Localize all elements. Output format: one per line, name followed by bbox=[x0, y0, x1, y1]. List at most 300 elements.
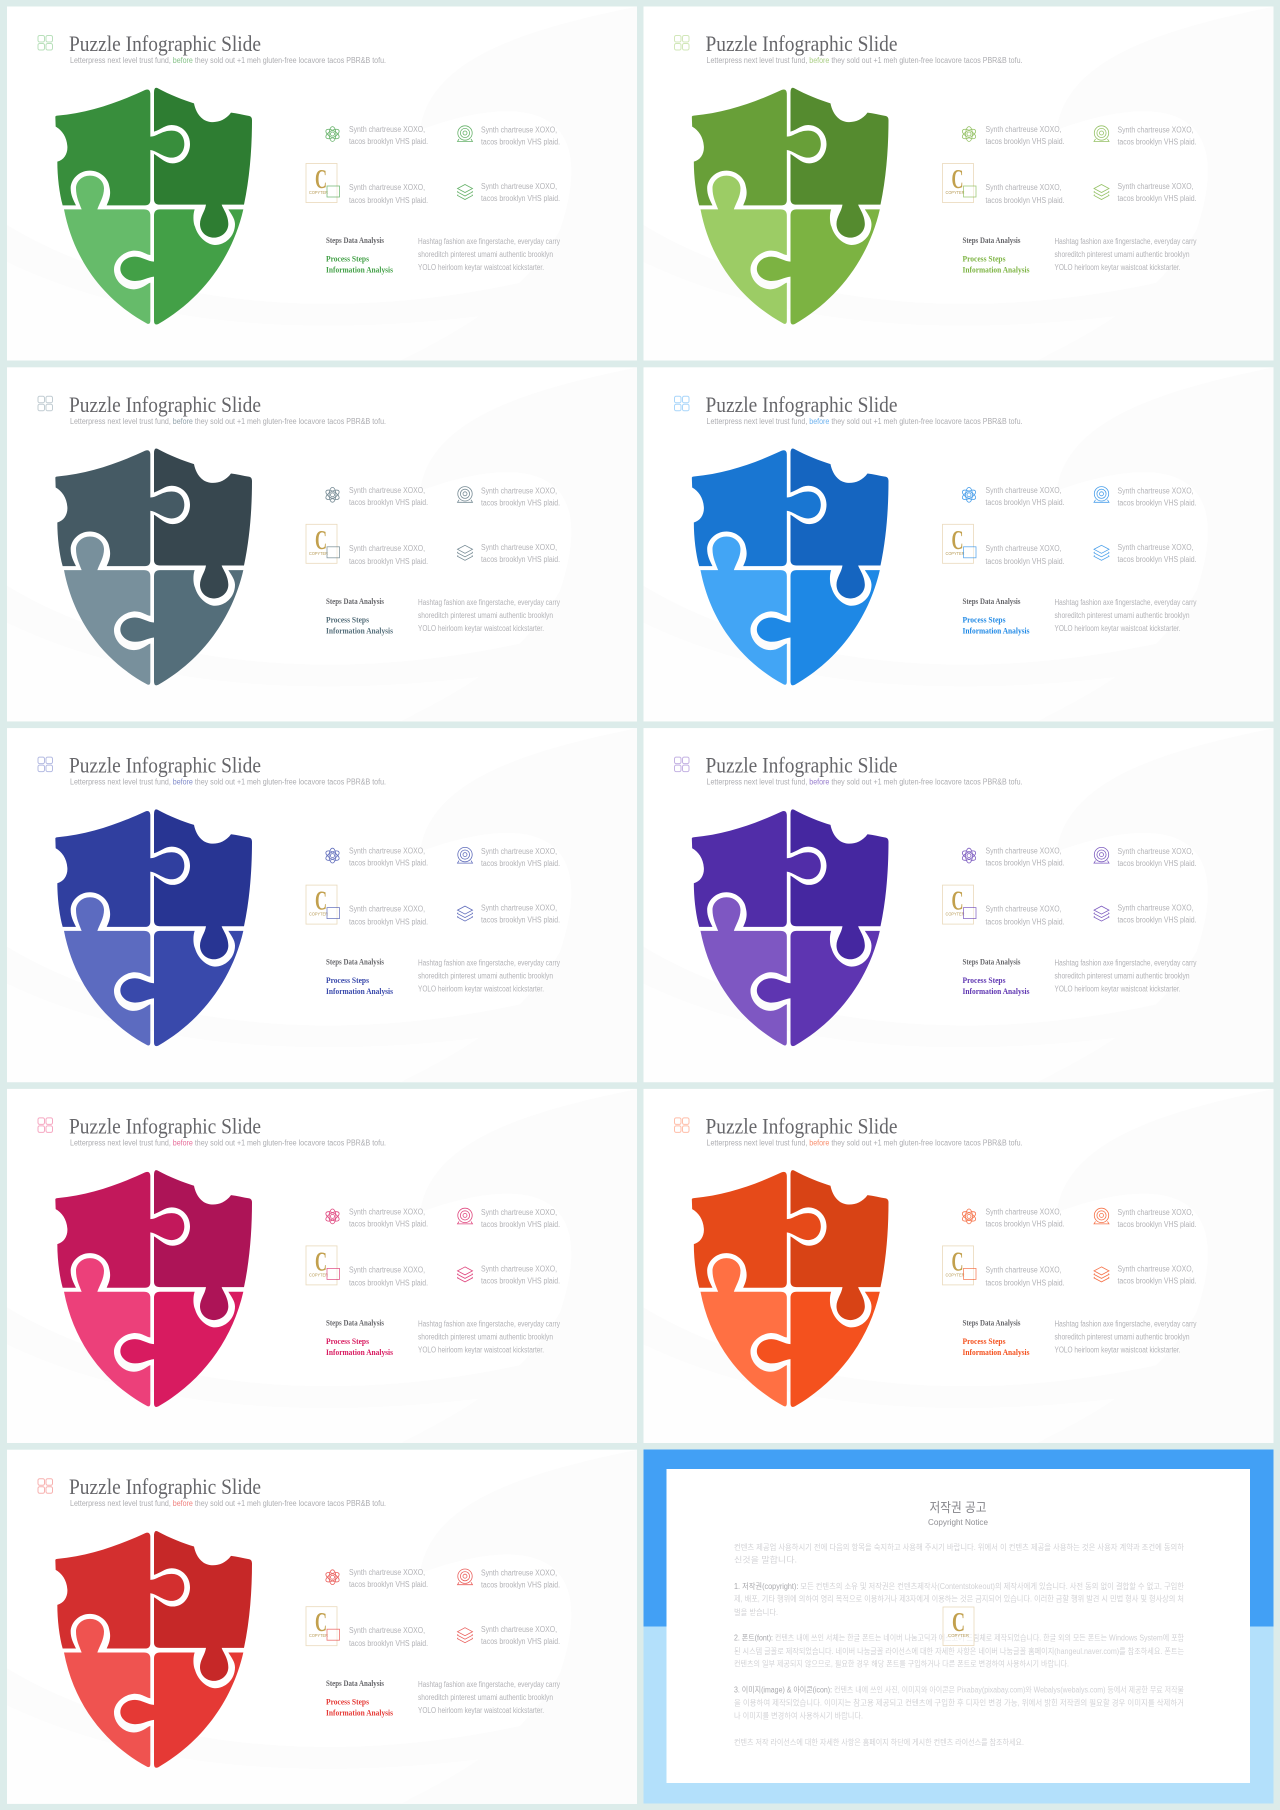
feature text 3: tacos brooklyn VHS plaid. bbox=[986, 557, 1064, 566]
feature text 2: Synth chartreuse XOXO, bbox=[481, 126, 557, 134]
puzzle shield bbox=[692, 88, 888, 325]
feature text 1 bbox=[349, 125, 428, 146]
panel: green slide bbox=[7, 6, 640, 361]
icon: layers bbox=[458, 1628, 472, 1643]
feature text 2: tacos brooklyn VHS plaid. bbox=[481, 1581, 560, 1590]
puzzle shield bbox=[692, 449, 888, 685]
subtitle: Letterpress next level trust fund, before they sold out +1 meh gluten-free locavore tacos PBR&B tofu. bbox=[706, 56, 1022, 65]
watermark thumbnail bbox=[306, 524, 340, 563]
feature text 4: Synth chartreuse XOXO, bbox=[481, 1264, 557, 1273]
slide background bbox=[644, 1088, 1276, 1443]
feature text 1 bbox=[349, 486, 428, 507]
icon: title grid bbox=[674, 36, 689, 50]
puzzle shield bbox=[55, 449, 252, 685]
slide background bbox=[7, 1449, 640, 1804]
steps labels: Information Analysis bbox=[326, 625, 394, 635]
feature text 1: tacos brooklyn VHS plaid. bbox=[349, 498, 428, 507]
feature text 1: tacos brooklyn VHS plaid. bbox=[349, 859, 428, 868]
feature text 3 bbox=[986, 544, 1064, 566]
feature text 2: Synth chartreuse XOXO, bbox=[481, 1208, 557, 1217]
description: YOLO heirloom keytar waistcoat kickstarter. bbox=[1054, 624, 1180, 633]
icon: target bbox=[458, 126, 472, 142]
puzzle shield bbox=[55, 1531, 252, 1768]
steps labels: Process Steps bbox=[962, 975, 1006, 985]
watermark thumbnail: C bbox=[315, 886, 327, 916]
light blue frame bottom bbox=[644, 1626, 1274, 1804]
watermark thumbnail: C bbox=[952, 164, 964, 194]
feature text 3: tacos brooklyn VHS plaid. bbox=[349, 196, 428, 205]
watermark thumbnail: COPYTER bbox=[309, 912, 329, 917]
feature text 4: tacos brooklyn VHS plaid. bbox=[481, 194, 560, 203]
watermark thumbnail bbox=[306, 1607, 340, 1646]
notice body text bbox=[734, 1542, 1185, 1747]
feature text 2 bbox=[1118, 847, 1196, 868]
feature text 2 bbox=[481, 126, 560, 146]
icon: atom bbox=[961, 1209, 977, 1224]
icon: atom bbox=[961, 848, 977, 863]
feature text 2 bbox=[481, 1208, 560, 1229]
icon: layers bbox=[458, 545, 472, 560]
feature text 1 bbox=[986, 1207, 1064, 1228]
feature text 3: tacos brooklyn VHS plaid. bbox=[986, 1278, 1064, 1287]
description bbox=[418, 959, 560, 994]
steps labels bbox=[326, 596, 394, 635]
icon: target bbox=[458, 1569, 472, 1585]
watermark thumbnail: COPYTER bbox=[309, 1272, 329, 1277]
steps labels: Steps Data Analysis bbox=[962, 1317, 1021, 1327]
watermark centre: COPYTER bbox=[948, 1633, 970, 1638]
description: Hashtag fashion axe fingerstache, everyday carry bbox=[418, 959, 560, 968]
puzzle shield bbox=[55, 1170, 252, 1407]
notice body text: 제, 배포, 기타 행위에 의하여 영리 목적으로 이용하거나 제3자에게 이용하는 것은 금지되어 있습니다. 이러한 금할 행위 발견 시 민법 형사 및 형사상의 처 bbox=[734, 1594, 1184, 1604]
feature text 4: tacos brooklyn VHS plaid. bbox=[481, 1276, 560, 1285]
icon: atom bbox=[324, 127, 341, 141]
feature text 4: tacos brooklyn VHS plaid. bbox=[481, 1637, 560, 1646]
feature text 1: Synth chartreuse XOXO, bbox=[349, 486, 425, 495]
description: YOLO heirloom keytar waistcoat kickstarter. bbox=[418, 263, 544, 272]
notice body text: 을 이용하여 제작되었습니다. 이미지는 참고용 제공되고 컨텐츠에 구입한 후 디자인 변경 가능, 위에서 밝힌 저작권의 필요할 경우 이미지를 삭제하거 bbox=[734, 1698, 1184, 1708]
feature text 4: Synth chartreuse XOXO, bbox=[481, 1625, 557, 1634]
feature text 3: Synth chartreuse XOXO, bbox=[986, 905, 1062, 914]
feature text 1 bbox=[986, 486, 1064, 507]
feature text 2: tacos brooklyn VHS plaid. bbox=[481, 138, 560, 146]
feature text 3 bbox=[986, 1265, 1064, 1287]
steps labels: Steps Data Analysis bbox=[962, 596, 1021, 606]
panel: blue slide bbox=[644, 367, 1276, 722]
description: Hashtag fashion axe fingerstache, everyday carry bbox=[418, 237, 560, 246]
slide background bbox=[7, 1088, 640, 1443]
steps labels bbox=[962, 596, 1030, 635]
icon: title grid bbox=[38, 1479, 52, 1493]
steps labels: Steps Data Analysis bbox=[326, 235, 385, 245]
feature text 2: tacos brooklyn VHS plaid. bbox=[1118, 138, 1196, 146]
watermark thumbnail: COPYTER bbox=[946, 912, 965, 917]
feature text 4 bbox=[1118, 543, 1196, 564]
feature text 2: Synth chartreuse XOXO, bbox=[1118, 126, 1194, 134]
description: shoreditch pinterest umami authentic brooklyn bbox=[418, 972, 553, 981]
watermark thumbnail bbox=[942, 1246, 976, 1285]
feature text 1: Synth chartreuse XOXO, bbox=[349, 1207, 425, 1216]
subtitle: Letterpress next level trust fund, before they sold out +1 meh gluten-free locavore tacos PBR&B tofu. bbox=[70, 1138, 386, 1147]
panel: copyright notice bbox=[644, 1450, 1274, 1804]
feature text 2: Synth chartreuse XOXO, bbox=[481, 486, 557, 495]
description bbox=[1054, 598, 1196, 633]
steps labels: Information Analysis bbox=[326, 1708, 394, 1718]
feature text 1: tacos brooklyn VHS plaid. bbox=[349, 1219, 428, 1228]
watermark thumbnail: COPYTER bbox=[309, 1633, 329, 1638]
steps labels: Process Steps bbox=[326, 1336, 370, 1346]
feature text 1: Synth chartreuse XOXO, bbox=[986, 847, 1062, 856]
feature text 2 bbox=[481, 1569, 560, 1590]
slide background bbox=[644, 728, 1276, 1083]
watermark thumbnail bbox=[306, 885, 340, 924]
slide background bbox=[644, 6, 1276, 361]
steps labels: Process Steps bbox=[962, 614, 1006, 624]
title: Puzzle Infographic Slide bbox=[69, 1113, 261, 1138]
panel: indigo slide bbox=[7, 728, 640, 1083]
icon: layers bbox=[1094, 906, 1109, 921]
icon: atom bbox=[324, 848, 341, 863]
title: Puzzle Infographic Slide bbox=[706, 392, 898, 417]
title: Puzzle Infographic Slide bbox=[69, 392, 261, 417]
feature text 2: tacos brooklyn VHS plaid. bbox=[1118, 859, 1196, 868]
description bbox=[418, 237, 560, 272]
feature text 2: Synth chartreuse XOXO, bbox=[1118, 847, 1194, 856]
watermark thumbnail: C bbox=[315, 1246, 327, 1276]
title: Puzzle Infographic Slide bbox=[706, 1113, 898, 1138]
description: YOLO heirloom keytar waistcoat kickstarter. bbox=[1054, 1345, 1180, 1354]
feature text 3: tacos brooklyn VHS plaid. bbox=[349, 557, 428, 566]
steps labels: Steps Data Analysis bbox=[326, 1678, 385, 1688]
description: YOLO heirloom keytar waistcoat kickstarter. bbox=[418, 1706, 544, 1715]
description: Hashtag fashion axe fingerstache, everyday carry bbox=[1054, 598, 1196, 607]
title: Puzzle Infographic Slide bbox=[69, 1474, 261, 1499]
feature text 2: tacos brooklyn VHS plaid. bbox=[481, 859, 560, 868]
feature text 1: tacos brooklyn VHS plaid. bbox=[986, 859, 1064, 868]
steps labels: Information Analysis bbox=[962, 625, 1030, 635]
feature text 3: Synth chartreuse XOXO, bbox=[986, 1265, 1062, 1274]
feature text 4 bbox=[1118, 182, 1196, 203]
puzzle shield bbox=[55, 809, 252, 1046]
description: YOLO heirloom keytar waistcoat kickstarter. bbox=[1054, 985, 1180, 994]
feature text 4: tacos brooklyn VHS plaid. bbox=[1118, 1276, 1196, 1285]
feature text 3 bbox=[349, 905, 428, 927]
feature text 3 bbox=[986, 905, 1064, 927]
title: Puzzle Infographic Slide bbox=[706, 753, 898, 778]
icon: layers bbox=[1094, 1267, 1109, 1282]
icon: layers bbox=[458, 906, 472, 921]
feature text 3: Synth chartreuse XOXO, bbox=[349, 544, 425, 553]
icon: atom bbox=[324, 1570, 341, 1585]
feature text 2: Synth chartreuse XOXO, bbox=[481, 1569, 557, 1578]
notice body text: 컨텐츠 저작 라이선스에 대한 자세한 사항은 홈페이지 하단에 게시한 컨텐츠 라이선스를 참조하세요. bbox=[734, 1737, 1024, 1747]
slide background bbox=[7, 6, 640, 361]
notice body text: 벌을 받습니다. bbox=[734, 1607, 778, 1617]
icon: layers bbox=[458, 1267, 472, 1282]
subtitle: Letterpress next level trust fund, before they sold out +1 meh gluten-free locavore tacos PBR&B tofu. bbox=[70, 417, 386, 426]
description: shoreditch pinterest umami authentic brooklyn bbox=[418, 250, 553, 259]
notice body text: 2. 폰트(font): 컨텐츠 내에 쓰인 서체는 한글 폰트는 네이버 나눔고딕과 에스코어 드림체로 제작되었습니다. 한글 외의 모든 폰트는 Windows System에 포함 bbox=[734, 1632, 1185, 1642]
feature text 3 bbox=[349, 1626, 428, 1648]
icon: atom bbox=[961, 127, 977, 141]
watermark thumbnail: C bbox=[315, 525, 327, 555]
watermark thumbnail bbox=[306, 1246, 340, 1285]
icon: title grid bbox=[674, 757, 689, 772]
feature text 3: tacos brooklyn VHS plaid. bbox=[349, 1639, 428, 1648]
feature text 4 bbox=[481, 182, 560, 203]
slide background bbox=[644, 367, 1276, 722]
icon: atom bbox=[961, 487, 977, 502]
feature text 4: tacos brooklyn VHS plaid. bbox=[481, 916, 560, 925]
steps labels: Process Steps bbox=[326, 614, 370, 624]
description bbox=[418, 598, 560, 633]
feature text 4: tacos brooklyn VHS plaid. bbox=[481, 555, 560, 564]
feature text 3: Synth chartreuse XOXO, bbox=[986, 183, 1062, 192]
feature text 3: Synth chartreuse XOXO, bbox=[349, 905, 425, 914]
icon: atom bbox=[324, 487, 341, 502]
feature text 3 bbox=[349, 183, 428, 205]
icon: title grid bbox=[674, 396, 689, 411]
description: shoreditch pinterest umami authentic brooklyn bbox=[1054, 1332, 1190, 1341]
icon: title grid bbox=[38, 36, 52, 50]
steps labels: Steps Data Analysis bbox=[326, 957, 385, 967]
panel: light green slide bbox=[644, 6, 1276, 361]
icon: target bbox=[458, 1208, 472, 1224]
notice body text: 컨텐츠 제공업 사용하시기 전에 다음의 항목을 숙지하고 사용해 주시기 바랍니다. 위에서 이 컨텐츠 제공을 사용하는 것은 사용자 계약과 조건에 동의하 bbox=[734, 1542, 1185, 1552]
description: shoreditch pinterest umami authentic brooklyn bbox=[1054, 611, 1190, 620]
steps labels: Information Analysis bbox=[326, 264, 394, 274]
feature text 3: tacos brooklyn VHS plaid. bbox=[986, 196, 1064, 205]
icon: target bbox=[458, 847, 472, 863]
subtitle: Letterpress next level trust fund, before they sold out +1 meh gluten-free locavore tacos PBR&B tofu. bbox=[70, 778, 386, 787]
panel: deep orange slide bbox=[644, 1088, 1276, 1443]
feature text 1 bbox=[986, 847, 1064, 868]
watermark thumbnail bbox=[942, 164, 976, 202]
feature text 1: Synth chartreuse XOXO, bbox=[349, 1568, 425, 1577]
slide background bbox=[7, 367, 640, 722]
feature text 1: Synth chartreuse XOXO, bbox=[986, 486, 1062, 495]
feature text 1: tacos brooklyn VHS plaid. bbox=[986, 498, 1064, 507]
description bbox=[418, 1680, 560, 1715]
icon: title grid bbox=[674, 1118, 689, 1132]
feature text 2: tacos brooklyn VHS plaid. bbox=[1118, 1220, 1196, 1229]
description: YOLO heirloom keytar waistcoat kickstarter. bbox=[1054, 263, 1180, 272]
feature text 2: tacos brooklyn VHS plaid. bbox=[1118, 498, 1196, 507]
steps labels: Information Analysis bbox=[962, 1347, 1030, 1357]
description bbox=[1054, 1319, 1196, 1354]
feature text 1: tacos brooklyn VHS plaid. bbox=[986, 137, 1064, 146]
description: shoreditch pinterest umami authentic brooklyn bbox=[1054, 250, 1190, 259]
watermark thumbnail: COPYTER bbox=[309, 551, 329, 556]
feature text 2: tacos brooklyn VHS plaid. bbox=[481, 1220, 560, 1229]
steps labels: Process Steps bbox=[962, 1336, 1006, 1346]
feature text 4: Synth chartreuse XOXO, bbox=[481, 543, 557, 552]
feature text 1 bbox=[349, 1207, 428, 1228]
feature text 3: Synth chartreuse XOXO, bbox=[349, 183, 425, 192]
watermark thumbnail bbox=[942, 885, 976, 924]
steps labels: Process Steps bbox=[326, 975, 370, 985]
steps labels: Information Analysis bbox=[326, 1347, 394, 1357]
watermark centre: C bbox=[952, 1607, 965, 1637]
steps labels bbox=[326, 957, 394, 996]
icon: target bbox=[1094, 487, 1109, 502]
steps labels: Steps Data Analysis bbox=[962, 957, 1021, 967]
steps labels bbox=[326, 1317, 394, 1357]
feature text 3: Synth chartreuse XOXO, bbox=[986, 544, 1062, 553]
watermark thumbnail: C bbox=[952, 1246, 964, 1276]
feature text 3: Synth chartreuse XOXO, bbox=[349, 1626, 425, 1635]
feature text 1 bbox=[349, 1568, 428, 1589]
feature text 2 bbox=[1118, 126, 1196, 146]
white notice card bbox=[666, 1469, 1250, 1783]
description: Hashtag fashion axe fingerstache, everyday carry bbox=[418, 1680, 560, 1689]
watermark thumbnail: C bbox=[315, 1607, 327, 1637]
subtitle: Letterpress next level trust fund, before they sold out +1 meh gluten-free locavore tacos PBR&B tofu. bbox=[706, 778, 1022, 787]
description: Hashtag fashion axe fingerstache, everyday carry bbox=[418, 1319, 560, 1328]
steps labels bbox=[326, 235, 394, 274]
feature text 4 bbox=[481, 1625, 560, 1646]
steps labels: Steps Data Analysis bbox=[326, 1317, 385, 1327]
feature text 4 bbox=[1118, 904, 1196, 925]
feature text 1: tacos brooklyn VHS plaid. bbox=[349, 1580, 428, 1589]
steps labels: Information Analysis bbox=[962, 264, 1030, 274]
icon: title grid bbox=[38, 1118, 52, 1132]
puzzle shield bbox=[55, 88, 252, 325]
watermark thumbnail: COPYTER bbox=[946, 190, 965, 195]
notice heading korean: 저작권 공고 bbox=[930, 1500, 987, 1515]
feature text 2 bbox=[1118, 486, 1196, 507]
icon: title grid bbox=[38, 396, 52, 411]
feature text 3: tacos brooklyn VHS plaid. bbox=[986, 918, 1064, 927]
icon: layers bbox=[1094, 545, 1109, 560]
watermark thumbnail bbox=[306, 164, 340, 202]
feature text 3 bbox=[349, 1265, 428, 1287]
subtitle: Letterpress next level trust fund, before they sold out +1 meh gluten-free locavore tacos PBR&B tofu. bbox=[70, 1499, 386, 1508]
steps labels: Process Steps bbox=[326, 254, 370, 264]
icon: layers bbox=[458, 184, 472, 200]
slide background bbox=[7, 728, 640, 1083]
feature text 2 bbox=[1118, 1208, 1196, 1229]
description: shoreditch pinterest umami authentic brooklyn bbox=[418, 611, 553, 620]
subtitle: Letterpress next level trust fund, before they sold out +1 meh gluten-free locavore tacos PBR&B tofu. bbox=[706, 1138, 1022, 1147]
watermark thumbnail: COPYTER bbox=[309, 190, 329, 195]
watermark thumbnail: COPYTER bbox=[946, 1272, 965, 1277]
feature text 2 bbox=[481, 486, 560, 507]
feature text 3: tacos brooklyn VHS plaid. bbox=[349, 1278, 428, 1287]
feature text 4: Synth chartreuse XOXO, bbox=[1118, 904, 1194, 913]
title: Puzzle Infographic Slide bbox=[706, 31, 898, 56]
notice body text: 나 이미지를 변경하여 사용하시기 바랍니다. bbox=[734, 1710, 863, 1720]
feature text 1 bbox=[986, 125, 1064, 146]
feature text 4: tacos brooklyn VHS plaid. bbox=[1118, 555, 1196, 564]
description bbox=[418, 1319, 560, 1354]
description: Hashtag fashion axe fingerstache, everyday carry bbox=[1054, 237, 1196, 246]
puzzle shield bbox=[692, 1170, 888, 1407]
steps labels: Information Analysis bbox=[962, 986, 1030, 996]
steps labels bbox=[962, 1317, 1030, 1357]
steps labels: Process Steps bbox=[962, 254, 1006, 264]
icon: target bbox=[1094, 847, 1109, 863]
feature text 3 bbox=[986, 183, 1064, 205]
description bbox=[1054, 959, 1196, 994]
description: YOLO heirloom keytar waistcoat kickstarter. bbox=[418, 624, 544, 633]
description: shoreditch pinterest umami authentic brooklyn bbox=[418, 1693, 553, 1702]
subtitle: Letterpress next level trust fund, before they sold out +1 meh gluten-free locavore tacos PBR&B tofu. bbox=[70, 56, 386, 65]
steps labels bbox=[326, 1678, 394, 1718]
panel: pink slide bbox=[7, 1088, 640, 1443]
watermark thumbnail bbox=[942, 524, 976, 563]
feature text 4: Synth chartreuse XOXO, bbox=[1118, 1264, 1194, 1273]
steps labels: Steps Data Analysis bbox=[962, 235, 1021, 245]
feature text 2: Synth chartreuse XOXO, bbox=[481, 847, 557, 856]
steps labels: Steps Data Analysis bbox=[326, 596, 385, 606]
icon: target bbox=[1094, 1208, 1109, 1224]
feature text 4: Synth chartreuse XOXO, bbox=[481, 904, 557, 913]
description: Hashtag fashion axe fingerstache, everyday carry bbox=[418, 598, 560, 607]
steps labels: Process Steps bbox=[326, 1697, 370, 1707]
description: Hashtag fashion axe fingerstache, everyday carry bbox=[1054, 959, 1196, 968]
watermark thumbnail: C bbox=[952, 525, 964, 555]
feature text 4: Synth chartreuse XOXO, bbox=[481, 182, 557, 191]
feature text 2 bbox=[481, 847, 560, 868]
watermark thumbnail: COPYTER bbox=[946, 551, 965, 556]
notice body text: 컨텐츠의 일부 제공되지 않으므로, 필요한 경우 해당 폰트를 구입하거나 다른 폰트로 변경하여 사용하시기 바랍니다. bbox=[734, 1658, 1069, 1668]
notice body text: 된 시스템 글꼴로 제작되었습니다. 네이버 나눔글꼴 라이선스에 대한 자세한 사항은 네이버 나눔글꼴 홈페이지(hangeul.naver.com)를 참조하세요. 폰트는 bbox=[734, 1646, 1184, 1656]
icon: title grid bbox=[38, 757, 52, 772]
feature text 3 bbox=[349, 544, 428, 566]
feature text 1: Synth chartreuse XOXO, bbox=[986, 125, 1062, 134]
feature text 2: Synth chartreuse XOXO, bbox=[1118, 486, 1194, 495]
watermark thumbnail: C bbox=[952, 886, 964, 916]
description: YOLO heirloom keytar waistcoat kickstarter. bbox=[418, 985, 544, 994]
panel: blue grey slide bbox=[7, 367, 640, 722]
notice heading english: Copyright Notice bbox=[928, 1517, 988, 1527]
icon: layers bbox=[1094, 184, 1109, 200]
feature text 1: tacos brooklyn VHS plaid. bbox=[986, 1219, 1064, 1228]
feature text 1: Synth chartreuse XOXO, bbox=[986, 1207, 1062, 1216]
steps labels: Information Analysis bbox=[326, 986, 394, 996]
feature text 4 bbox=[481, 1264, 560, 1285]
watermark thumbnail: C bbox=[315, 164, 327, 194]
description bbox=[1054, 237, 1196, 272]
subtitle: Letterpress next level trust fund, before they sold out +1 meh gluten-free locavore tacos PBR&B tofu. bbox=[706, 417, 1022, 426]
watermark centre bbox=[943, 1607, 974, 1646]
feature text 1 bbox=[349, 847, 428, 868]
steps labels bbox=[962, 235, 1030, 274]
notice body text: 신것을 말합니다. bbox=[734, 1554, 797, 1564]
icon: target bbox=[1094, 126, 1109, 142]
title: Puzzle Infographic Slide bbox=[69, 31, 261, 56]
feature text 1: tacos brooklyn VHS plaid. bbox=[349, 137, 428, 146]
feature text 4 bbox=[481, 543, 560, 564]
feature text 4 bbox=[1118, 1264, 1196, 1285]
description: shoreditch pinterest umami authentic brooklyn bbox=[418, 1332, 553, 1341]
puzzle shield bbox=[692, 809, 888, 1046]
description: Hashtag fashion axe fingerstache, everyday carry bbox=[1054, 1319, 1196, 1328]
feature text 4: tacos brooklyn VHS plaid. bbox=[1118, 194, 1196, 203]
icon: atom bbox=[324, 1209, 341, 1224]
title: Puzzle Infographic Slide bbox=[69, 753, 261, 778]
panel: red slide bbox=[7, 1449, 640, 1804]
steps labels bbox=[962, 957, 1030, 996]
feature text 3: Synth chartreuse XOXO, bbox=[349, 1265, 425, 1274]
feature text 4: Synth chartreuse XOXO, bbox=[1118, 543, 1194, 552]
feature text 4: Synth chartreuse XOXO, bbox=[1118, 182, 1194, 191]
feature text 4: tacos brooklyn VHS plaid. bbox=[1118, 916, 1196, 925]
description: YOLO heirloom keytar waistcoat kickstarter. bbox=[418, 1345, 544, 1354]
feature text 2: Synth chartreuse XOXO, bbox=[1118, 1208, 1194, 1217]
feature text 2: tacos brooklyn VHS plaid. bbox=[481, 498, 560, 507]
